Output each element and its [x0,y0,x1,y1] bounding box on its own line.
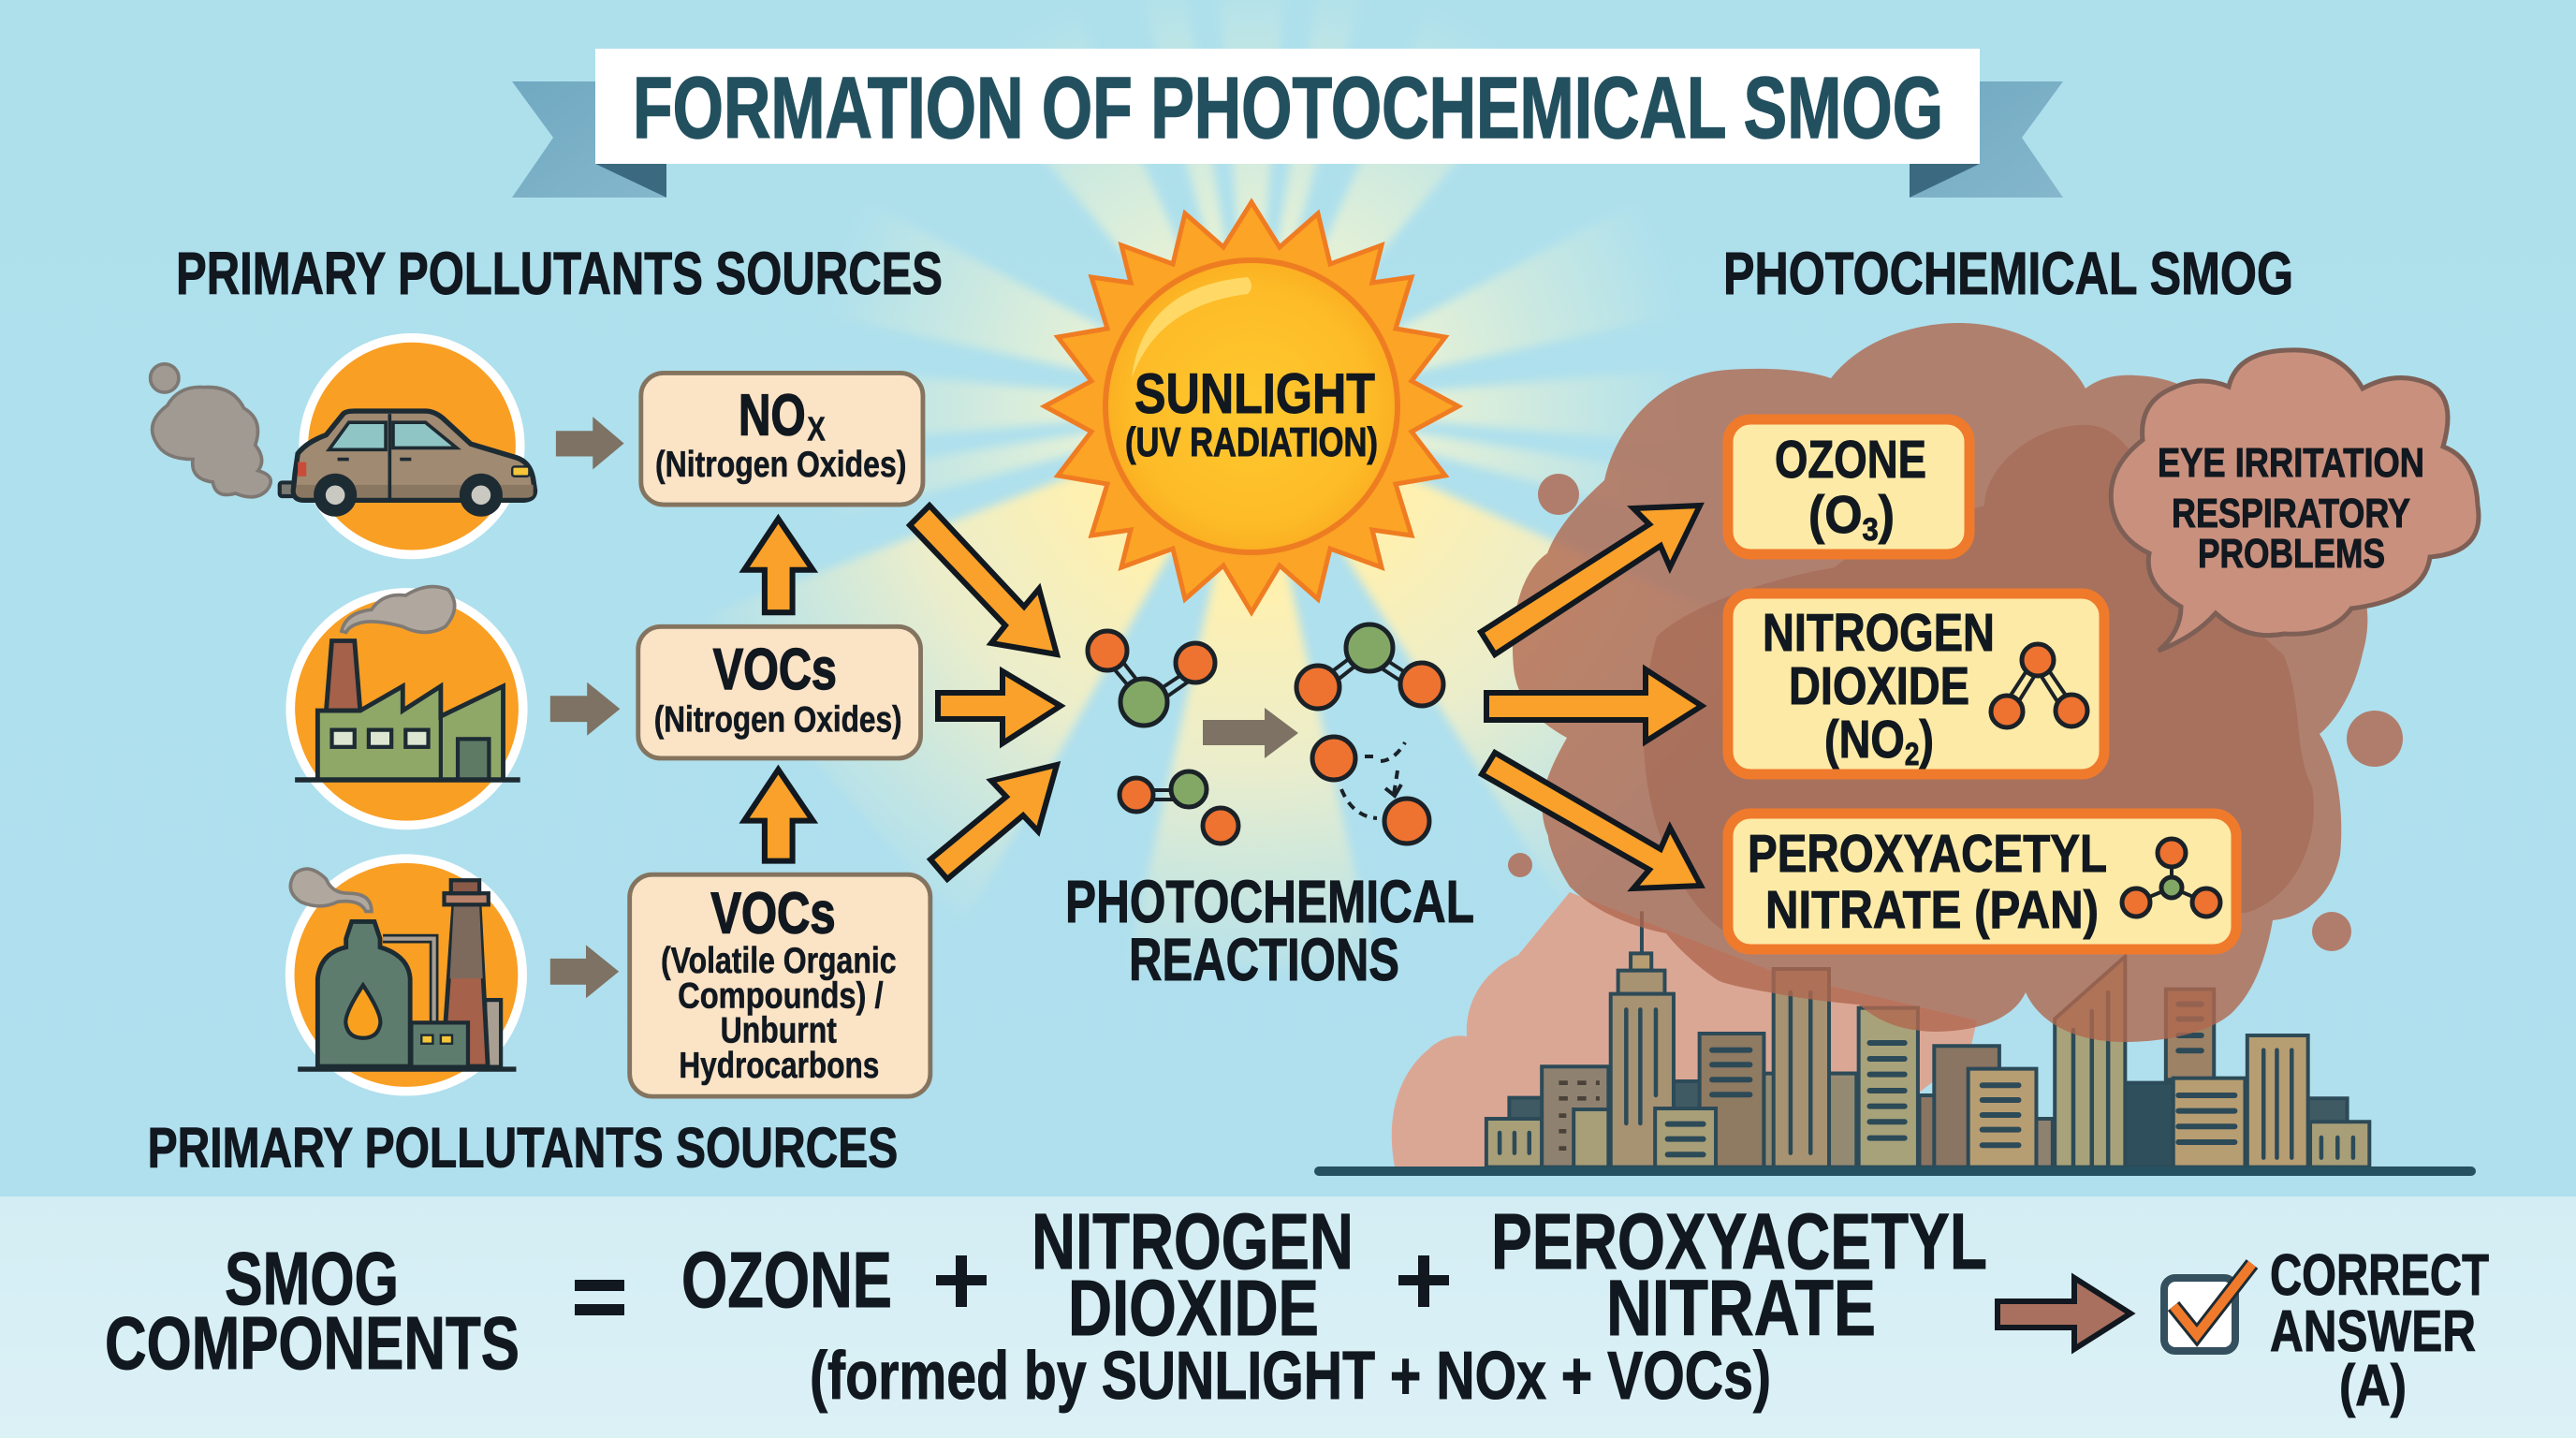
title banner [512,49,2063,198]
heading: primary pollutants sources (bottom): PRIMARY POLLUTANTS SOURCES [148,1115,898,1179]
label: photochemical reactions: REACTIONS [1129,926,1399,993]
sun [1045,202,1458,612]
box: nitrogen dioxide [1728,594,2104,774]
city skyline [1486,911,2369,1167]
icon: factory [290,587,523,825]
box: NOx: NO [739,384,806,448]
box: peroxyacetyl nitrate: PEROXYACETYL [1748,824,2107,884]
sunlight label [1125,362,1378,465]
arrow: reactions to ozone [1481,506,1700,654]
smog puff [1538,474,1579,515]
box: VOCs volatile organic compounds: Compounds) / [678,976,884,1017]
molecules: reactants [1088,631,1238,844]
smog cloud: main mass [1513,323,2367,1042]
city ground line [1314,1167,2476,1176]
box: VOCs volatile organic compounds: VOCs [710,882,836,946]
box: VOCs volatile organic compounds: Unburnt [721,1011,837,1051]
text: correct answer: CORRECT [2270,1243,2489,1308]
text: peroxyacetyl nitrate: NITRATE [1606,1264,1876,1352]
box: nitrogen dioxide: NITROGEN [1763,603,1995,663]
arrow: VOCs up to NOx [744,519,812,612]
molecules: products [1296,624,1443,844]
callout: health effects: RESPIRATORY [2172,491,2410,536]
box: nitrogen dioxide: (NO [1824,710,1922,770]
heading: photochemical smog: PHOTOCHEMICAL SMOG [1723,240,2293,307]
box: NOx [641,373,923,505]
molecule: PAN [2122,839,2220,917]
text: correct answer: (A) [2339,1354,2407,1418]
sunlight label: SUNLIGHT [1134,362,1375,425]
arrow: refinery to VOCs [550,945,619,998]
arrow: reactions to PAN [1482,753,1701,888]
box: peroxyacetyl nitrate [1728,814,2236,949]
icon: check box [2164,1264,2252,1351]
box: ozone: OZONE [1775,430,1926,490]
box: nitrogen dioxide: DIOXIDE [1789,656,1969,716]
box: peroxyacetyl nitrate: NITRATE (PAN) [1765,880,2099,940]
box: VOCs nitrogen oxides: (Nitrogen Oxides) [654,699,902,740]
box: nitrogen dioxide: 2 [1905,737,1919,772]
box: NOx: X [807,410,826,448]
box: ozone [1728,419,1969,554]
text: peroxyacetyl nitrate [1491,1197,1987,1352]
arrow: factory to VOCs [550,682,620,736]
smog puff [2347,711,2403,767]
icon: refinery [290,858,522,1092]
plus sign [936,1255,987,1307]
box: nitrogen dioxide: ) [1919,710,1934,770]
plus sign [1398,1255,1449,1307]
box: VOCs nitrogen oxides [638,626,921,758]
text: formed by: (formed by SUNLIGHT + NOx + VOCs) [810,1339,1771,1414]
box: ozone: 3 [1863,512,1879,548]
text: nitrogen dioxide: DIOXIDE [1068,1264,1319,1352]
arrow: VOCs to reactions [938,671,1061,743]
text: smog components: COMPONENTS [105,1301,520,1385]
arrow: reaction progress [1203,708,1298,758]
box: ozone: (O [1808,485,1867,545]
arrow: VOCs compounds to reactions [930,765,1057,879]
smog puff [1508,853,1532,877]
text: nitrogen dioxide [1032,1197,1354,1352]
text: nitrogen dioxide: NITROGEN [1032,1197,1354,1285]
equals sign [575,1280,624,1315]
smog cloud: light lower layer [1392,892,1977,1171]
text: smog components: SMOG [225,1237,399,1320]
sun rays [690,0,1813,968]
text: ozone: OZONE [681,1236,892,1324]
text: correct answer [2270,1243,2489,1418]
box: ozone: ) [1879,485,1895,545]
label: photochemical reactions [1065,868,1474,993]
text: correct answer: ANSWER [2270,1299,2476,1364]
panel: pollutant sources [148,338,930,1179]
callout: health effects: EYE IRRITATION [2158,440,2424,486]
arrow: reactions to nitrogen dioxide [1486,669,1702,741]
arrow: NOx to reactions [910,506,1057,654]
panel: smog components equation [0,1196,2576,1438]
smog puff [2312,912,2351,951]
title: FORMATION OF PHOTOCHEMICAL SMOG [633,59,1943,156]
heading: primary pollutants sources (top): PRIMARY POLLUTANTS SOURCES [176,240,943,307]
callout: health effects [2111,350,2479,651]
molecule: NO2 [1991,644,2087,727]
box: VOCs nitrogen oxides: VOCs [713,638,837,702]
arrow: car to NOx [556,417,624,469]
text: smog components [105,1237,520,1385]
box: VOCs volatile organic compounds: (Volatile Organic [661,941,896,981]
sunlight label: (UV RADIATION) [1125,419,1378,465]
smog cloud: inner darker lobes [1644,425,2314,936]
callout: health effects: PROBLEMS [2198,531,2385,577]
label: photochemical reactions: PHOTOCHEMICAL [1065,868,1474,935]
arrow: to correct answer [1998,1278,2130,1349]
box: VOCs volatile organic compounds: Hydrocarbons [679,1046,879,1086]
icon: car with exhaust [151,338,534,554]
box: VOCs volatile organic compounds [630,874,930,1096]
text: peroxyacetyl nitrate: PEROXYACETYL [1491,1197,1987,1285]
arrow: VOCs up to VOCs [744,770,812,861]
box: NOx: (Nitrogen Oxides) [655,445,906,485]
